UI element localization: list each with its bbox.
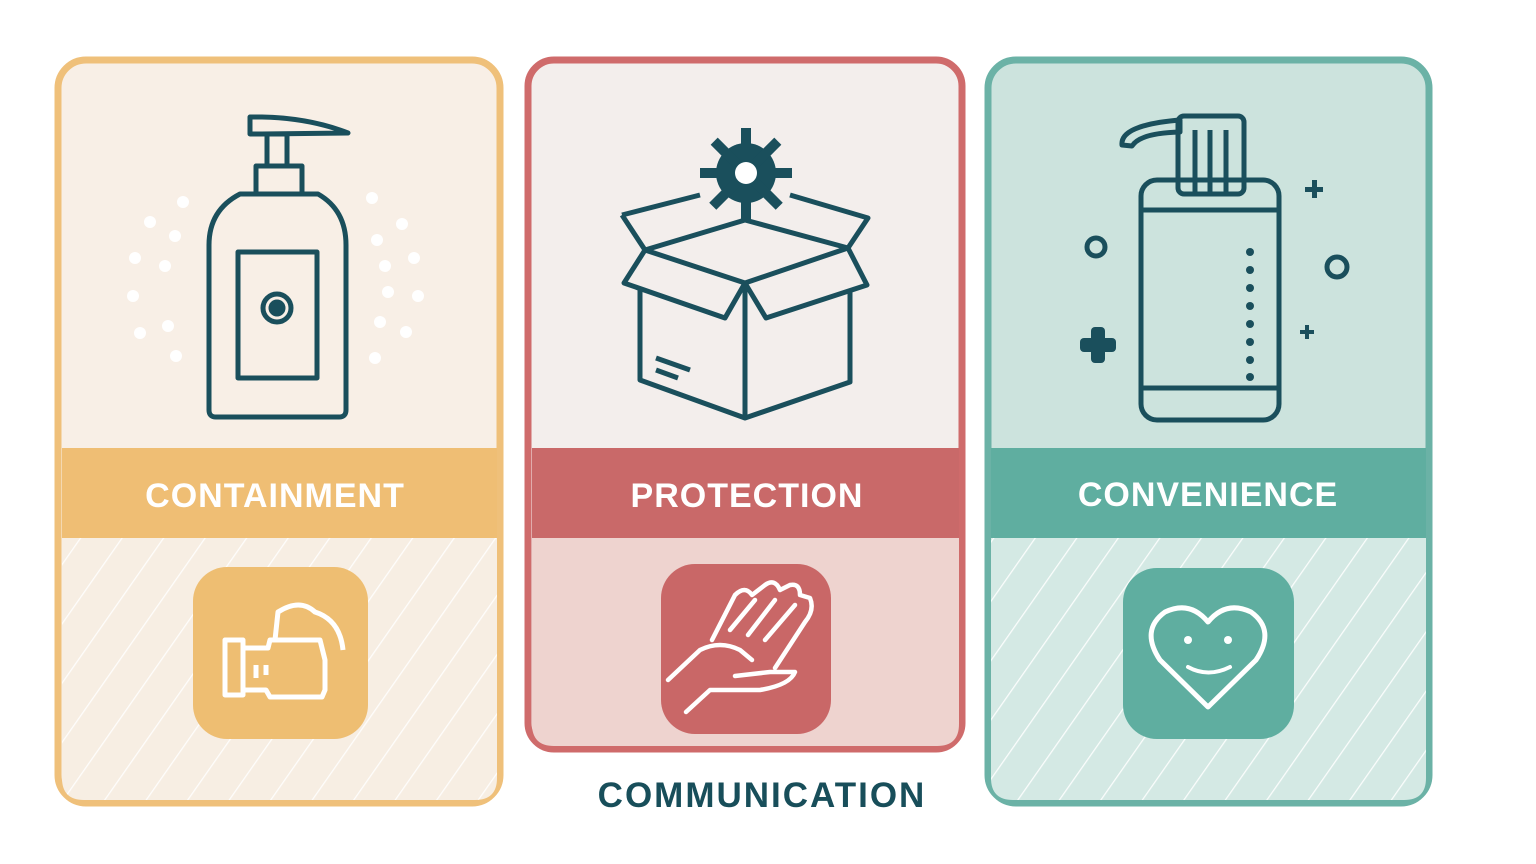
panel: convenience: CONVENIENCE [1078, 476, 1338, 514]
icon: hand tile [193, 567, 368, 739]
icon: hands tile [661, 564, 831, 734]
caption: communication: COMMUNICATION [598, 776, 926, 815]
panel: protection: PROTECTION [631, 477, 863, 515]
icon: box with virus [622, 195, 868, 418]
panel: convenience [988, 60, 1429, 803]
band: convenience heading [991, 448, 1426, 538]
panel: containment: CONTAINMENT [145, 477, 405, 515]
band: containment heading [62, 448, 497, 538]
icon: pump bottle [1087, 116, 1347, 420]
panel: protection [528, 60, 962, 749]
panel: containment [58, 60, 500, 803]
band: protection heading [532, 448, 959, 538]
icon: heart tile [1123, 568, 1294, 739]
icon: soap bottle [209, 117, 348, 417]
